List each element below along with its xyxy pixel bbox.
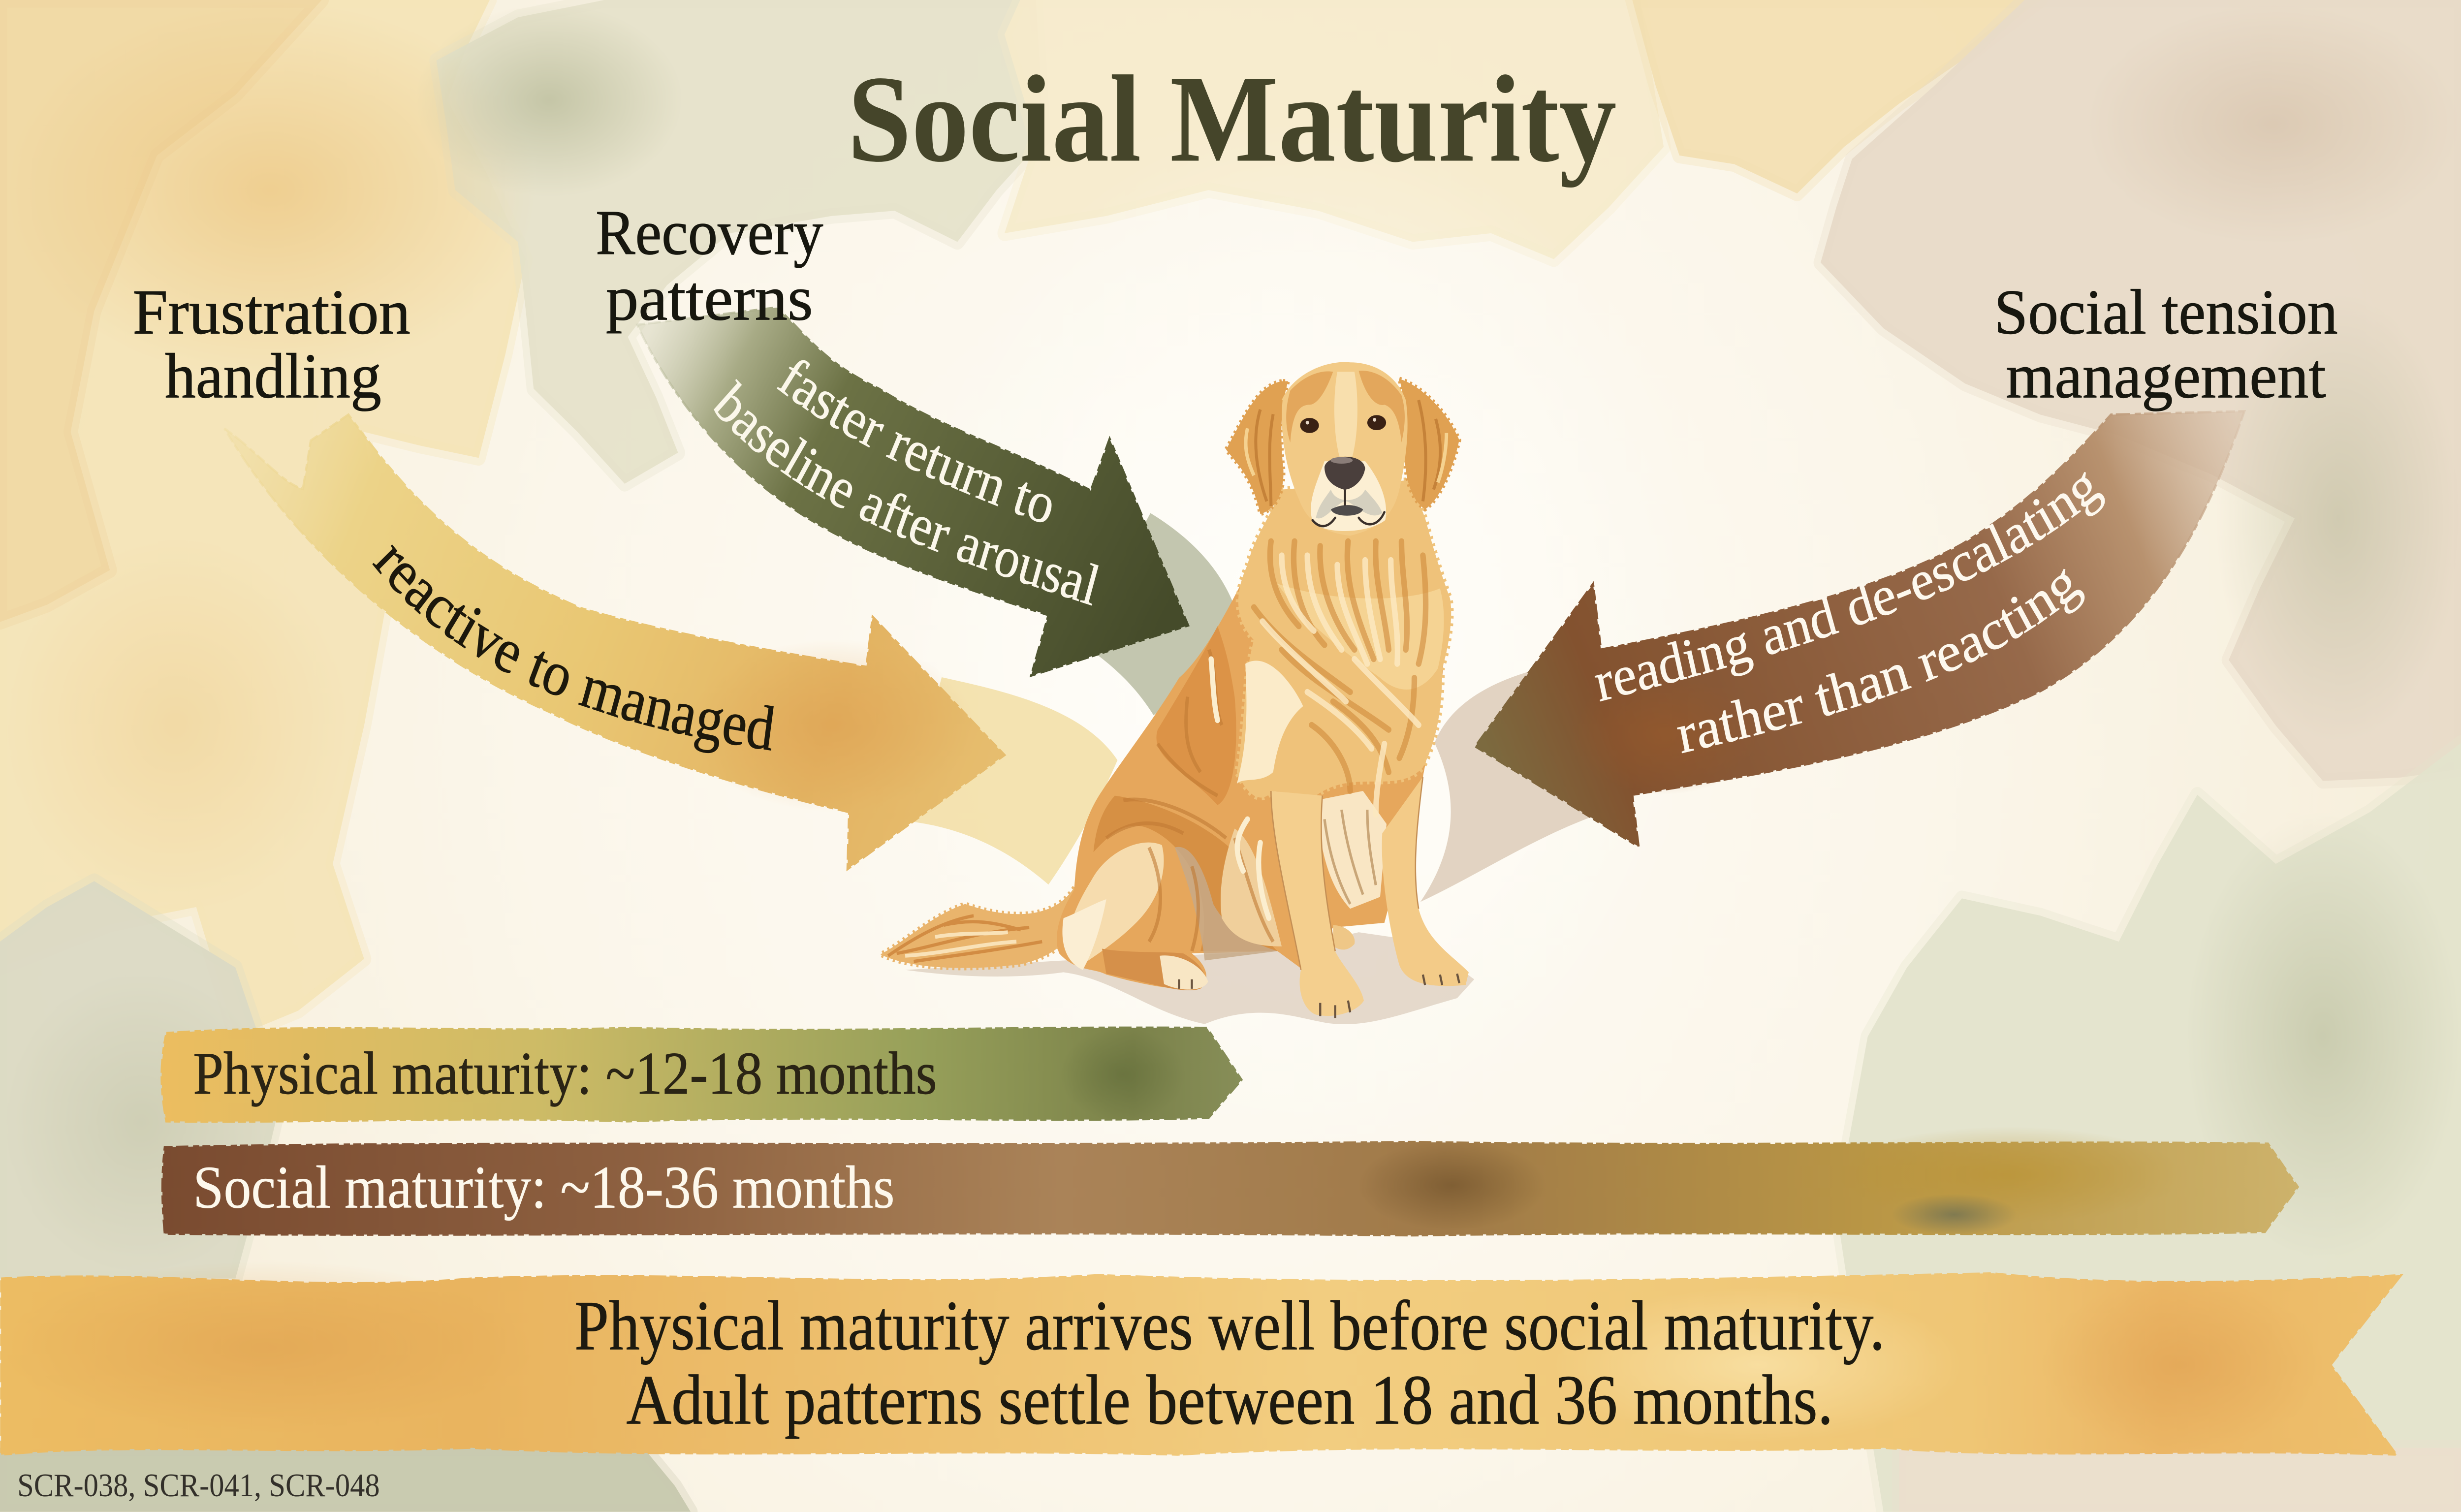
arrow: frustration handling	[223, 413, 1117, 885]
arrow mottling	[691, 639, 973, 812]
mouth	[1331, 505, 1363, 516]
leg line work	[1271, 777, 1423, 970]
bar shape	[162, 1142, 2298, 1235]
arrow ghost wash	[903, 677, 1117, 884]
label: recovery patterns: Recovery	[596, 197, 823, 268]
ribbon shape	[1, 1273, 2401, 1455]
eyes	[1300, 415, 1386, 433]
haunch light patch	[1069, 843, 1164, 963]
arrow caption: reading and de-escalating	[1595, 472, 2105, 702]
back shading	[1156, 626, 1236, 805]
ear fur strands	[1256, 400, 1440, 506]
arrow caption: faster return to	[777, 360, 1051, 523]
arrow ghost wash	[1080, 513, 1235, 715]
bar mottling	[1357, 1140, 1546, 1230]
timeline bar: social maturity	[162, 1127, 2298, 1235]
timeline bar: physical maturity	[161, 1028, 1241, 1122]
right ear	[1399, 379, 1459, 509]
label: social tension management: Social tension	[1994, 276, 2338, 347]
arrow: recovery patterns	[636, 307, 1232, 716]
chest mid tones	[1277, 584, 1444, 690]
belly fluff	[1175, 847, 1277, 960]
chest white patch	[1237, 661, 1303, 784]
banner mottling	[0, 1261, 534, 1434]
bar label: Physical maturity: ~12-18 months	[193, 1040, 937, 1107]
arrow body	[224, 414, 1005, 869]
head	[1282, 362, 1408, 536]
nose	[1325, 457, 1365, 490]
tail	[881, 887, 1074, 968]
arrow caption line two: rather than reacting	[1677, 569, 2085, 753]
illustration: golden retriever sitting	[881, 362, 1474, 1024]
arrow body	[1475, 411, 2244, 847]
left ear	[1226, 381, 1288, 514]
source codes footnote: SCR-038, SCR-041, SCR-048	[17, 1467, 380, 1504]
title: Social Maturity	[848, 50, 1616, 188]
arrow ghost wash	[1420, 665, 1616, 902]
hind paw	[1102, 949, 1205, 990]
bar shape	[161, 1028, 1241, 1122]
banner text: Adult patterns settle between 18 and 36 months.	[626, 1360, 1833, 1439]
arrow caption line two: baseline after arousal	[714, 379, 1099, 605]
label: frustration handling: handling	[165, 340, 381, 411]
bar label: Social maturity: ~18-36 months	[193, 1154, 895, 1221]
arrow body	[637, 308, 1188, 676]
banner text: Physical maturity arrives well before social maturity.	[574, 1286, 1885, 1365]
bar mottling	[1059, 1028, 1185, 1121]
far hind toe	[1333, 925, 1355, 949]
label: social tension management: management	[2006, 340, 2326, 411]
far front leg	[1382, 777, 1469, 986]
under-chest fur	[1316, 791, 1387, 909]
conclusion banner	[0, 1261, 2401, 1455]
body and haunch	[1057, 532, 1449, 989]
muzzle	[1311, 461, 1386, 531]
label: frustration handling: Frustration	[132, 276, 410, 347]
head shading	[1286, 371, 1405, 442]
label: recovery patterns: patterns	[606, 262, 813, 334]
arrow mottling	[1570, 674, 1758, 795]
arrow: social tension management	[1420, 410, 2246, 902]
neck ruff, chest and mane	[1237, 480, 1451, 797]
body fur strands	[1106, 650, 1273, 951]
near front leg	[1271, 791, 1364, 1016]
chest fur strands	[1254, 541, 1426, 815]
ground shadow	[905, 932, 1474, 1024]
arrow caption: reactive to managed	[372, 544, 774, 753]
